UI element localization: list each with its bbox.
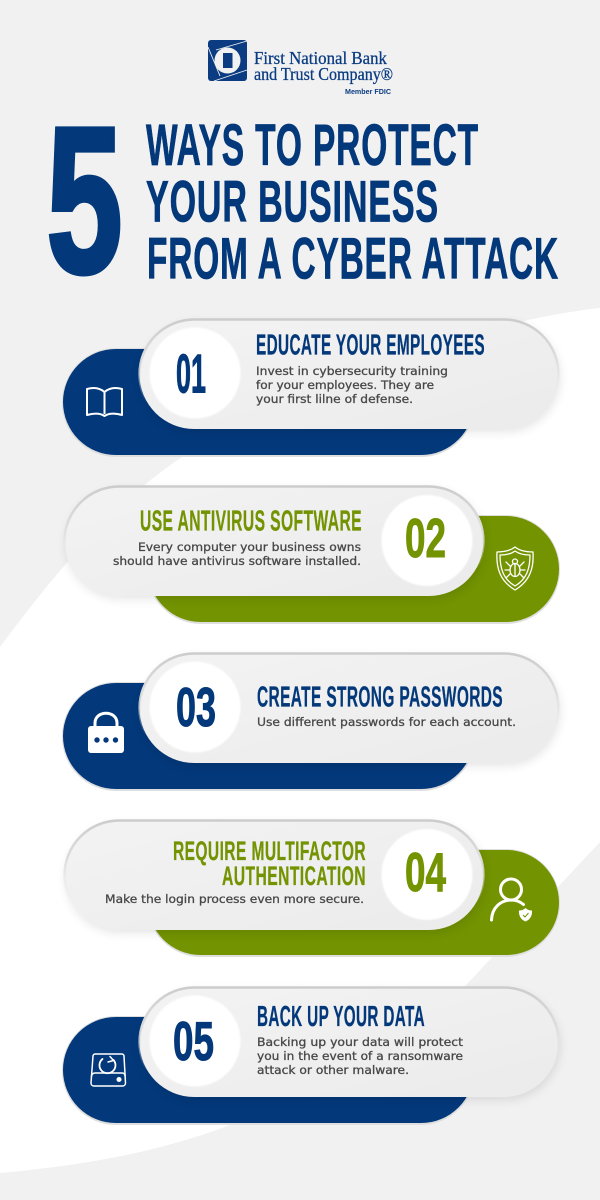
panel: step 05 back up your data bbox=[62, 988, 560, 1125]
number 04: 04 bbox=[405, 841, 446, 903]
number 05: 05 bbox=[173, 1010, 214, 1072]
bank name: First National Bank bbox=[254, 48, 387, 68]
description: Invest in cybersecurity training bbox=[256, 364, 448, 378]
number 02: 02 bbox=[405, 507, 446, 569]
big number 5: 5 bbox=[46, 85, 122, 317]
title bbox=[46, 85, 559, 317]
icon: padlock bbox=[88, 713, 124, 753]
heading bbox=[173, 836, 366, 891]
description: for your employees. They are bbox=[256, 378, 434, 392]
description: should have antivirus software installed. bbox=[113, 554, 361, 568]
heading: USE ANTIVIRUS SOFTWARE bbox=[140, 506, 362, 538]
description: your first lilne of defense. bbox=[256, 392, 413, 406]
panel: step 01 educate your employees bbox=[62, 320, 560, 457]
description: Every computer your business owns bbox=[138, 540, 361, 554]
description bbox=[113, 540, 361, 568]
panel: step 03 create strong passwords bbox=[62, 654, 560, 791]
icon: shield with bug bbox=[497, 547, 533, 590]
description: Make the login process even more secure. bbox=[105, 892, 364, 906]
heading: BACK UP YOUR DATA bbox=[257, 1001, 425, 1033]
member fdic: Member FDIC bbox=[345, 89, 391, 96]
icon: open book bbox=[87, 388, 122, 416]
icon: backup drive bbox=[91, 1054, 126, 1086]
panel: step 02 use antivirus software bbox=[64, 486, 560, 624]
description: Use different passwords for each account. bbox=[257, 715, 516, 729]
bank name second line: and Trust Company® bbox=[254, 64, 393, 84]
description bbox=[257, 1035, 464, 1077]
panel: step 04 require multifactor authentication bbox=[64, 820, 560, 957]
description: attack or other malware. bbox=[257, 1063, 409, 1077]
logo bbox=[208, 40, 393, 96]
heading: AUTHENTICATION bbox=[222, 861, 366, 891]
description: you in the event of a ransomware bbox=[257, 1049, 463, 1063]
panel: step 01 educate your employees: 01 bbox=[176, 342, 206, 404]
number 03: 03 bbox=[176, 676, 216, 738]
description bbox=[256, 364, 448, 406]
description: Backing up your data will protect bbox=[257, 1035, 464, 1049]
icon: bank logo mark bbox=[208, 40, 247, 81]
icon: user with shield bbox=[492, 879, 532, 922]
heading: REQUIRE MULTIFACTOR bbox=[173, 836, 366, 866]
